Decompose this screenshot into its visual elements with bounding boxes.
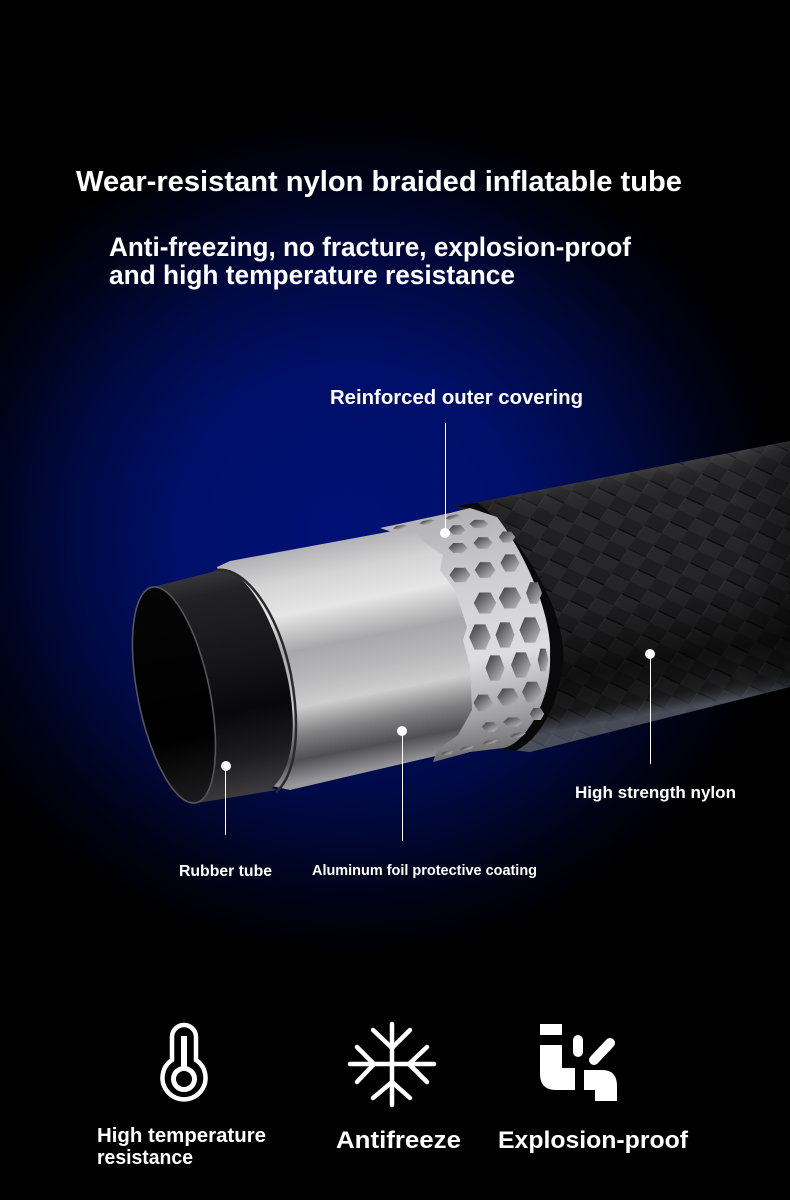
- title: Wear-resistant nylon braided inflatable tube: [76, 166, 682, 198]
- icon: burst pipe: [540, 1024, 617, 1101]
- rubber tube: [117, 570, 296, 810]
- callout: reinforced outer covering: Reinforced outer covering: [330, 387, 583, 409]
- label: high temperature resistance: [97, 1124, 266, 1169]
- callout: rubber tube: Rubber tube: [179, 863, 272, 880]
- callout: aluminum foil protective coating: Aluminum foil protective coating: [312, 863, 537, 879]
- hose illustration: [117, 430, 790, 810]
- nylon braided outer layer: [440, 430, 790, 760]
- callout: rubber tube: [179, 761, 272, 880]
- callout: high strength nylon: High strength nylon: [575, 784, 736, 802]
- callout: aluminum foil protective coating: [312, 726, 537, 879]
- label: explosion-proof: Explosion-proof: [498, 1127, 689, 1154]
- subtitle: [109, 232, 632, 290]
- subtitle: and high temperature resistance: [109, 260, 515, 290]
- label: high temperature resistance: resistance: [97, 1146, 193, 1169]
- label: antifreeze: Antifreeze: [336, 1127, 461, 1154]
- icon: thermometer: [163, 1025, 206, 1099]
- subtitle: Anti-freezing, no fracture, explosion-proof: [109, 232, 632, 262]
- reinforced honeycomb layer: [380, 508, 550, 762]
- icon: snowflake: [350, 1024, 434, 1105]
- callout: reinforced outer covering: [330, 387, 583, 538]
- label: high temperature resistance: High temperature: [97, 1124, 266, 1147]
- aluminum foil layer: [217, 526, 495, 790]
- callout: high strength nylon: [575, 649, 736, 802]
